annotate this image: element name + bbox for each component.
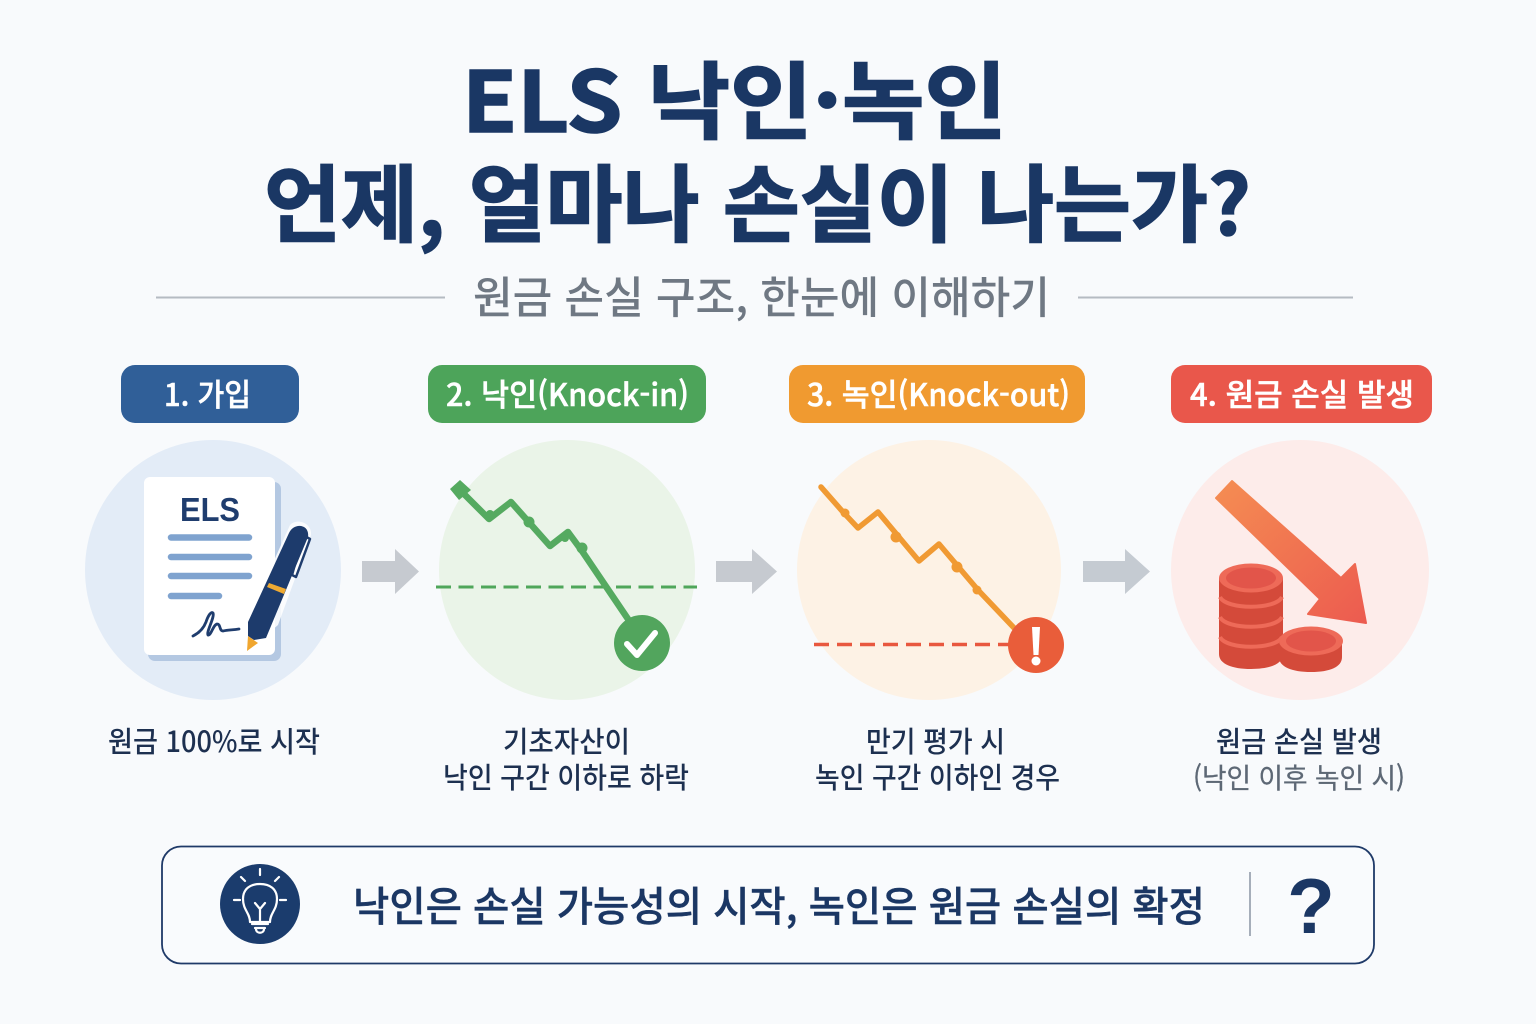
caption [815,719,1060,797]
caption: 원금 100%로 시작 [108,719,320,761]
arrow [716,549,777,594]
title: 언제, 얼마나 손실이 나는가? [264,139,1251,260]
badge: 4. 원금 손실 발생 [1171,365,1432,423]
caption: 낙인 구간 이하로 하락 [443,755,689,797]
callout [162,846,1374,964]
badge: 2. 낙인(Knock-in) [428,365,706,423]
title: ELS 낙인·녹인 [462,36,1007,157]
badge: 1. 가입 [121,365,299,423]
arrow [1083,549,1150,594]
caption: 녹인 구간 이하인 경우 [815,755,1060,797]
badge: 2. 낙인(Knock-in): 2. 낙인(Knock-in) [446,370,689,415]
icon: question mark: ? [1287,862,1335,950]
badge: 3. 녹인(Knock-out): 3. 녹인(Knock-out) [807,370,1070,415]
badge: 4. 원금 손실 발생: 4. 원금 손실 발생 [1190,370,1414,415]
caption [443,719,689,797]
caption: 원금 손실 발생 [1216,719,1382,761]
chart: falling line with check [436,440,697,700]
subtitle: 원금 손실 구조, 한눈에 이해하기 [473,262,1050,326]
icon: contract and pen [85,440,341,700]
panel: step 2 knock-in [428,365,706,797]
badge: 1. 가입: 1. 가입 [164,370,251,415]
panel: step 1 join [85,365,341,761]
callout text: 낙인은 손실 가능성의 시작, 녹인은 원금 손실의 확정 [353,873,1205,933]
panel: step 3 knock-out [789,365,1085,797]
caption [1193,719,1405,797]
caption: 기초자산이 [503,719,630,761]
title [264,36,1251,260]
panel: step 4 principal loss [1171,365,1432,797]
caption: 만기 평가 시 [866,719,1005,761]
arrow [362,549,419,594]
icon: contract and pen: ELS [180,491,240,528]
icon: down arrow and coins [1171,440,1429,700]
chart: falling line with alert [797,440,1064,700]
icon: light bulb [220,864,300,944]
caption: (낙인 이후 녹인 시) [1193,757,1405,797]
